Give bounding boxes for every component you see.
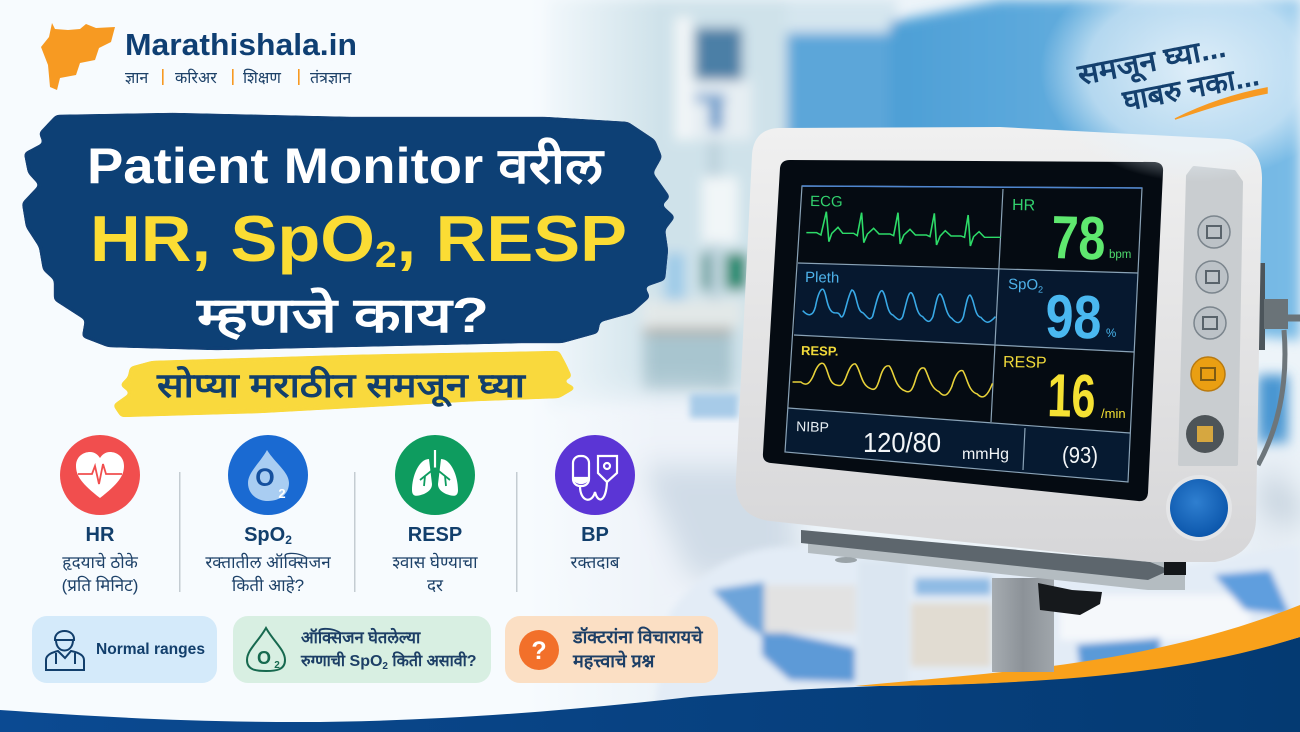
pill: oxygen patient SpO2: किती असावी? [388, 651, 477, 670]
screen labels: Pleth [805, 269, 839, 287]
heading line 3: म्हणजे काय? [196, 287, 489, 343]
metric: HR: (प्रति मिनिट) [62, 575, 138, 595]
metric: RESP: श्वास घेण्याचा [392, 552, 478, 572]
pill: oxygen patient SpO2: रुग्णाची SpO [301, 653, 382, 670]
slogan badge: घाबरु नका... [1119, 60, 1262, 118]
screen labels: 2 [1038, 285, 1043, 295]
SpO2 reading: 98 [1045, 282, 1102, 351]
tagline: शिक्षण [243, 68, 281, 87]
screen panels [794, 263, 1138, 352]
metric: HR: हृदयाचे ठोके [62, 552, 139, 572]
screen labels: SpO [1008, 276, 1038, 294]
slogan badge [1040, 0, 1300, 182]
brand name: Marathishala.in [125, 27, 357, 62]
heading line 2: 2 [375, 234, 397, 275]
monitor stand [801, 530, 1186, 672]
icon: heart [60, 435, 140, 515]
title panel: navy brush [22, 113, 675, 350]
metric: SpO2: SpO [244, 524, 285, 546]
RESP waveform [793, 363, 993, 397]
tagline [125, 68, 352, 87]
screen labels [796, 193, 1047, 435]
pill: doctor questions: महत्त्वाचे प्रश्न [572, 650, 656, 671]
subtitle banner: yellow brush: सोप्या मराठीत समजून घ्या [156, 365, 526, 408]
SpO2 reading: % [1106, 328, 1116, 340]
NIBP reading: (93) [1062, 442, 1098, 468]
pill: oxygen patient SpO2: 2 [382, 661, 388, 672]
pill: normal ranges [32, 616, 217, 683]
screen labels: RESP. [801, 343, 839, 359]
icon: Maharashtra map [41, 23, 115, 90]
heading line 2: , RESP [397, 202, 627, 275]
power knob [1166, 475, 1232, 541]
metric: RESP: RESP [408, 524, 462, 546]
RESP reading: /min [1101, 406, 1126, 421]
orange underline [1175, 88, 1267, 119]
icon: oxygen drop: O [255, 464, 275, 492]
metric: SpO2: 2 [285, 533, 292, 547]
subtitle banner: yellow brush [113, 351, 576, 417]
pill: doctor questions [505, 616, 718, 683]
monitor cable [1258, 263, 1300, 465]
ECG waveform [806, 212, 1001, 246]
icon: oxygen drop [228, 435, 308, 515]
metric: RESP: दर [427, 576, 444, 595]
metric: SpO2: रक्तातील ऑक्सिजन [205, 552, 331, 572]
button panel [1180, 168, 1241, 464]
Pleth waveform [803, 289, 995, 323]
NIBP reading: mmHg [962, 446, 1009, 463]
tagline: करिअर [175, 68, 217, 87]
bottom wave: orange swoosh [855, 605, 1300, 686]
icon: doctor [46, 631, 84, 670]
slogan badge: समजून घ्या... [1074, 32, 1229, 94]
bottom wave: navy band [0, 637, 1300, 732]
screen labels: ECG [810, 193, 843, 211]
screen labels: NIBP [796, 418, 829, 435]
tagline: तंत्रज्ञान [310, 69, 352, 87]
HR reading: 78 [1051, 203, 1106, 272]
pill: normal ranges: Normal ranges [96, 641, 205, 658]
bedding with blue checks [650, 545, 1300, 732]
patient monitor [736, 127, 1262, 562]
screen labels: HR [1012, 197, 1035, 214]
screen bezel [763, 160, 1163, 501]
icon: oxygen drop: 2 [278, 486, 286, 501]
icon: question mark [519, 630, 559, 670]
metric: RESP [392, 435, 478, 595]
HR reading: bpm [1109, 249, 1131, 261]
metric: SpO2 [205, 435, 331, 595]
NIBP reading: 120/80 [863, 427, 941, 458]
pill: oxygen patient SpO2: ऑक्सिजन घेतलेल्या [301, 627, 421, 647]
metric: BP: BP [581, 524, 609, 546]
screen grid [785, 186, 1142, 482]
metric: HR [60, 435, 140, 595]
icon: green oxygen drop: O [257, 648, 271, 668]
icon: question mark: ? [531, 637, 547, 665]
icon: green oxygen drop [247, 628, 285, 671]
buttons [1186, 216, 1230, 453]
icon: blood pressure cuff [555, 435, 635, 515]
icon: green oxygen drop: 2 [274, 660, 280, 671]
RESP reading: 16 [1047, 361, 1096, 430]
heading line 1: Patient Monitor वरील [87, 137, 605, 194]
pill: doctor questions: डॉक्टरांना विचारायचे [572, 626, 704, 647]
metric: BP: रक्तदाब [571, 553, 620, 572]
pill: oxygen patient SpO2 [233, 616, 491, 683]
metric: SpO2: किती आहे? [232, 575, 304, 595]
screen labels: RESP [1003, 354, 1047, 372]
tagline: ज्ञान [125, 70, 149, 87]
monitor body [736, 127, 1262, 562]
heading line 2: HR, SpO [90, 202, 354, 275]
logo [41, 23, 357, 90]
NIBP reading [863, 427, 1098, 468]
metric: HR: HR [86, 524, 115, 546]
metric: BP [555, 435, 635, 572]
icon: lungs [395, 435, 475, 515]
